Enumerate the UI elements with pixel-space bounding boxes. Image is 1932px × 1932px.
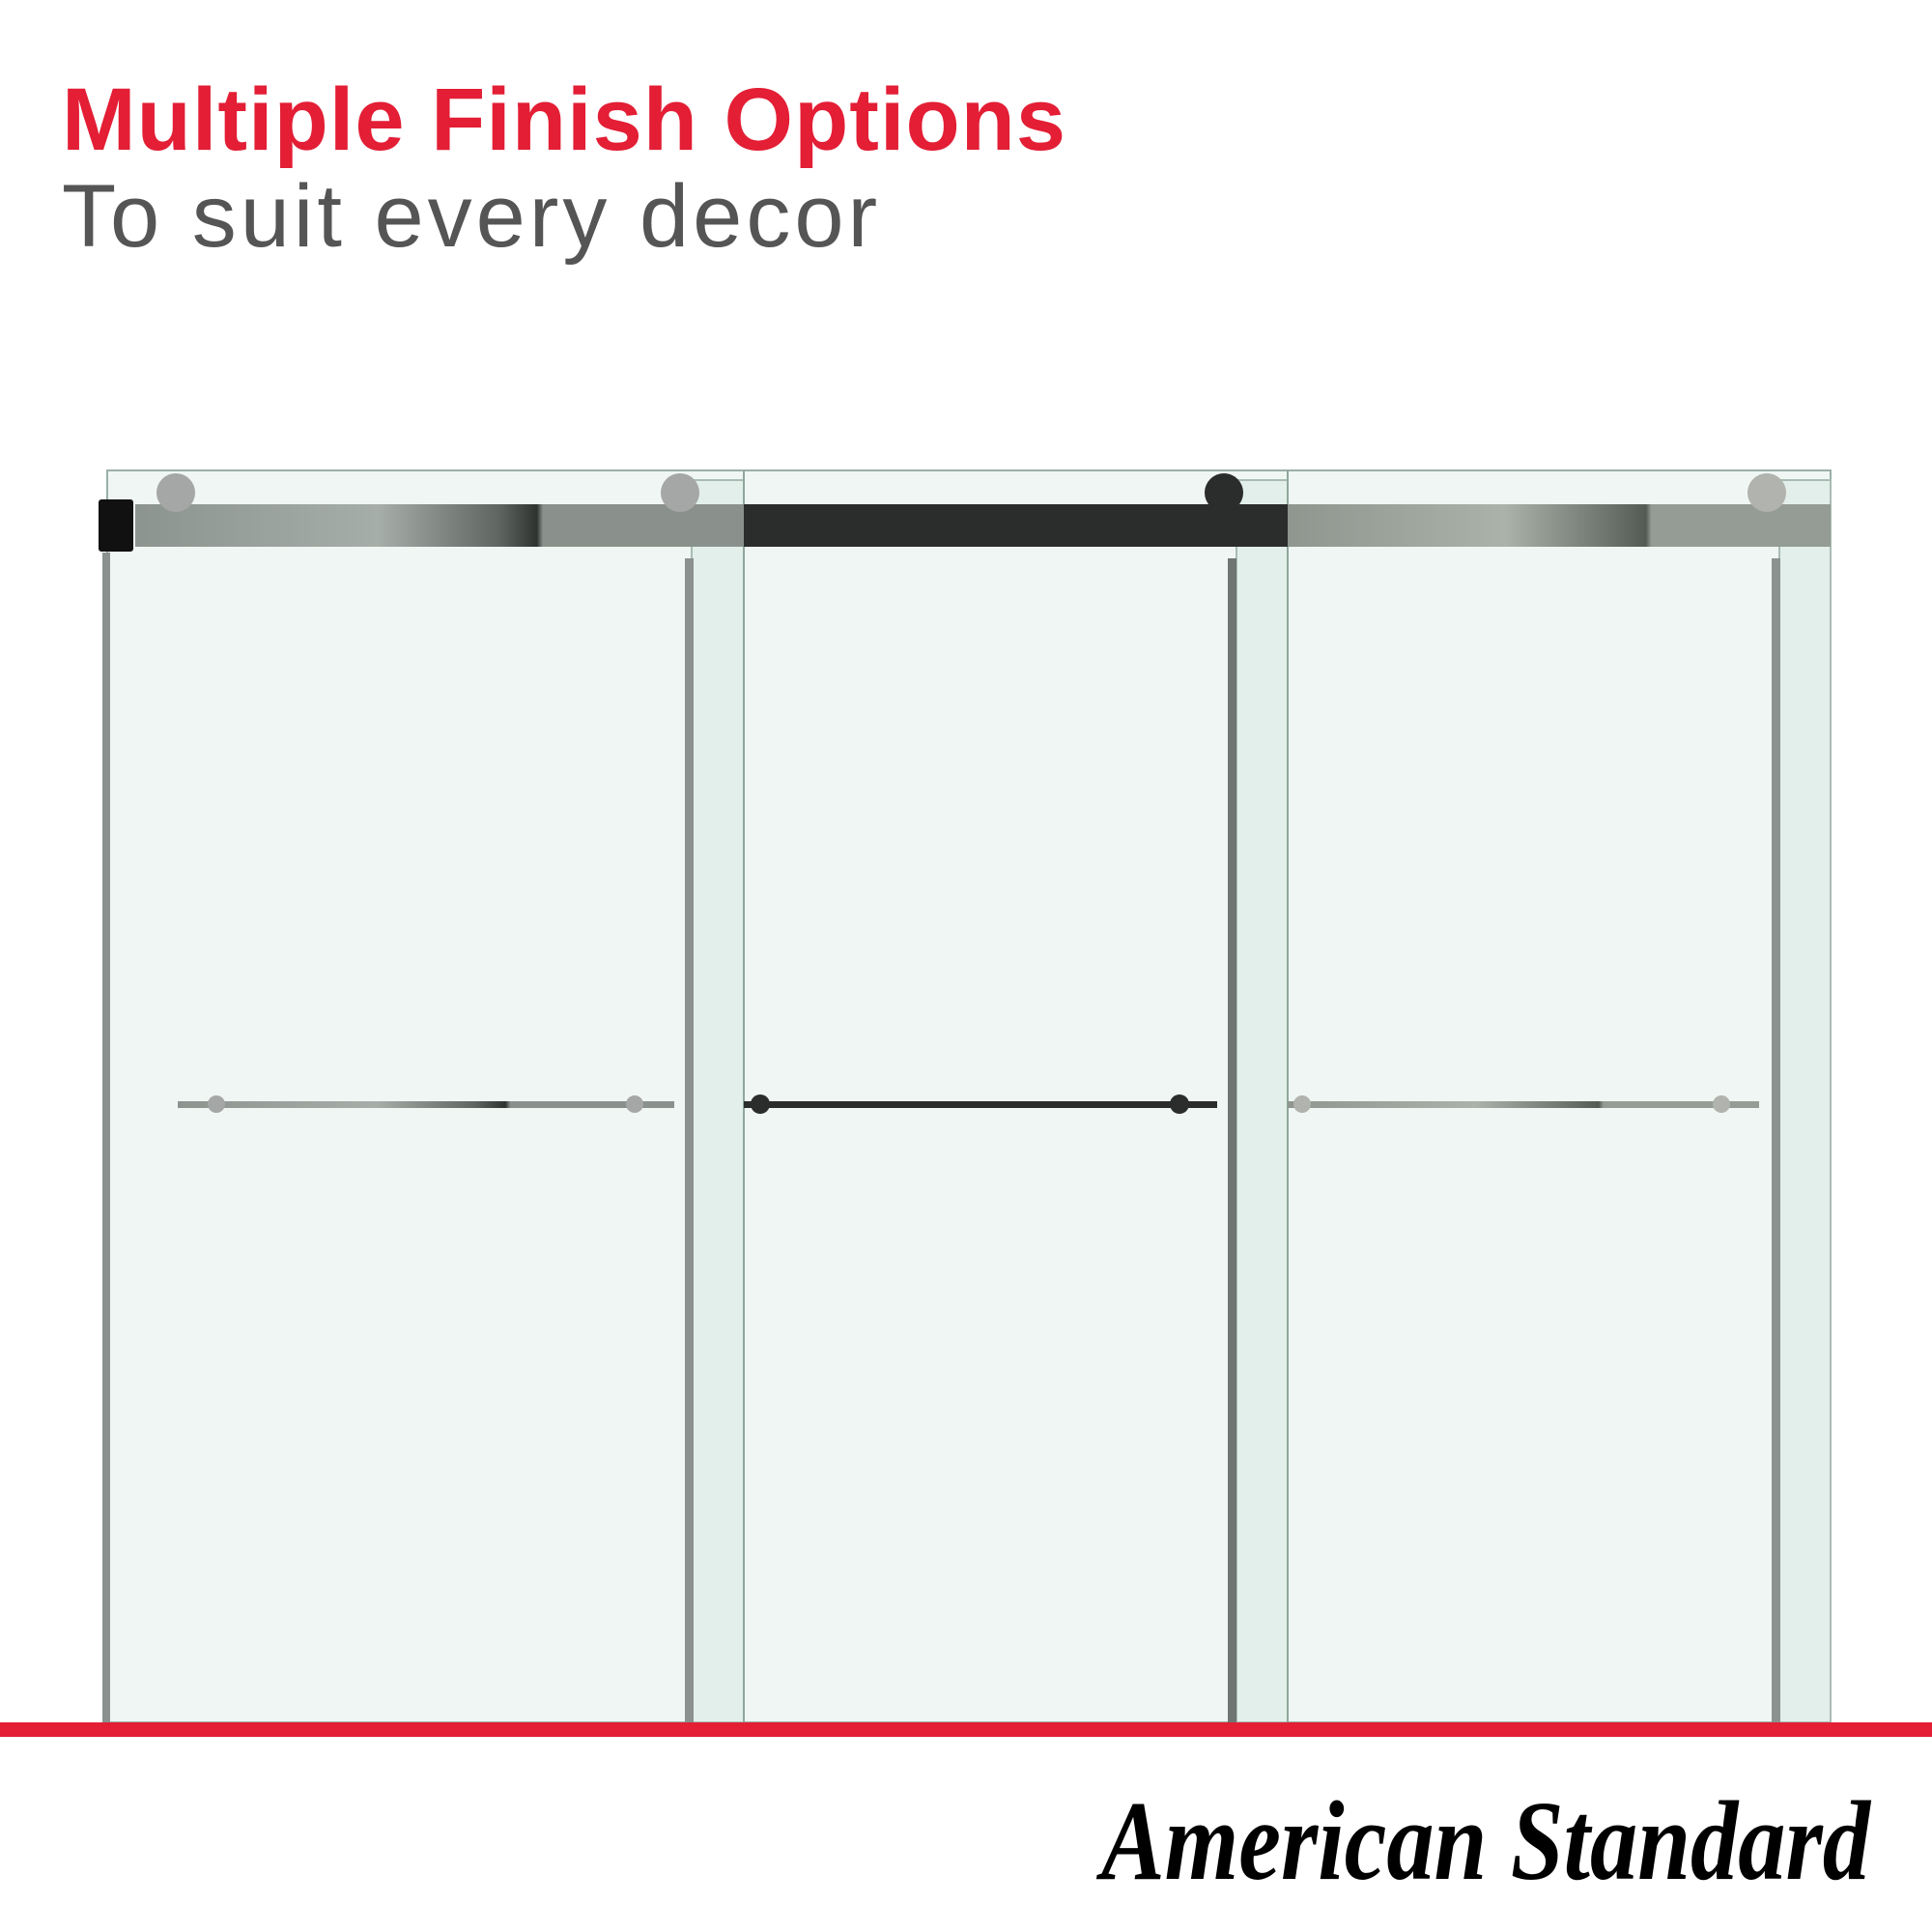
red floor line <box>0 1722 1932 1737</box>
rail: chrome <box>135 504 744 547</box>
end bracket <box>99 499 133 552</box>
subtitle: To suit every decor <box>62 167 881 266</box>
rail: matte black <box>744 504 1288 547</box>
rail: brushed nickel <box>1288 504 1831 547</box>
rollers <box>156 473 1786 512</box>
glass panels <box>107 470 1831 1722</box>
vertical posts <box>102 553 1780 1722</box>
handles <box>178 1094 1759 1114</box>
title: Multiple Finish Options <box>62 71 1066 169</box>
